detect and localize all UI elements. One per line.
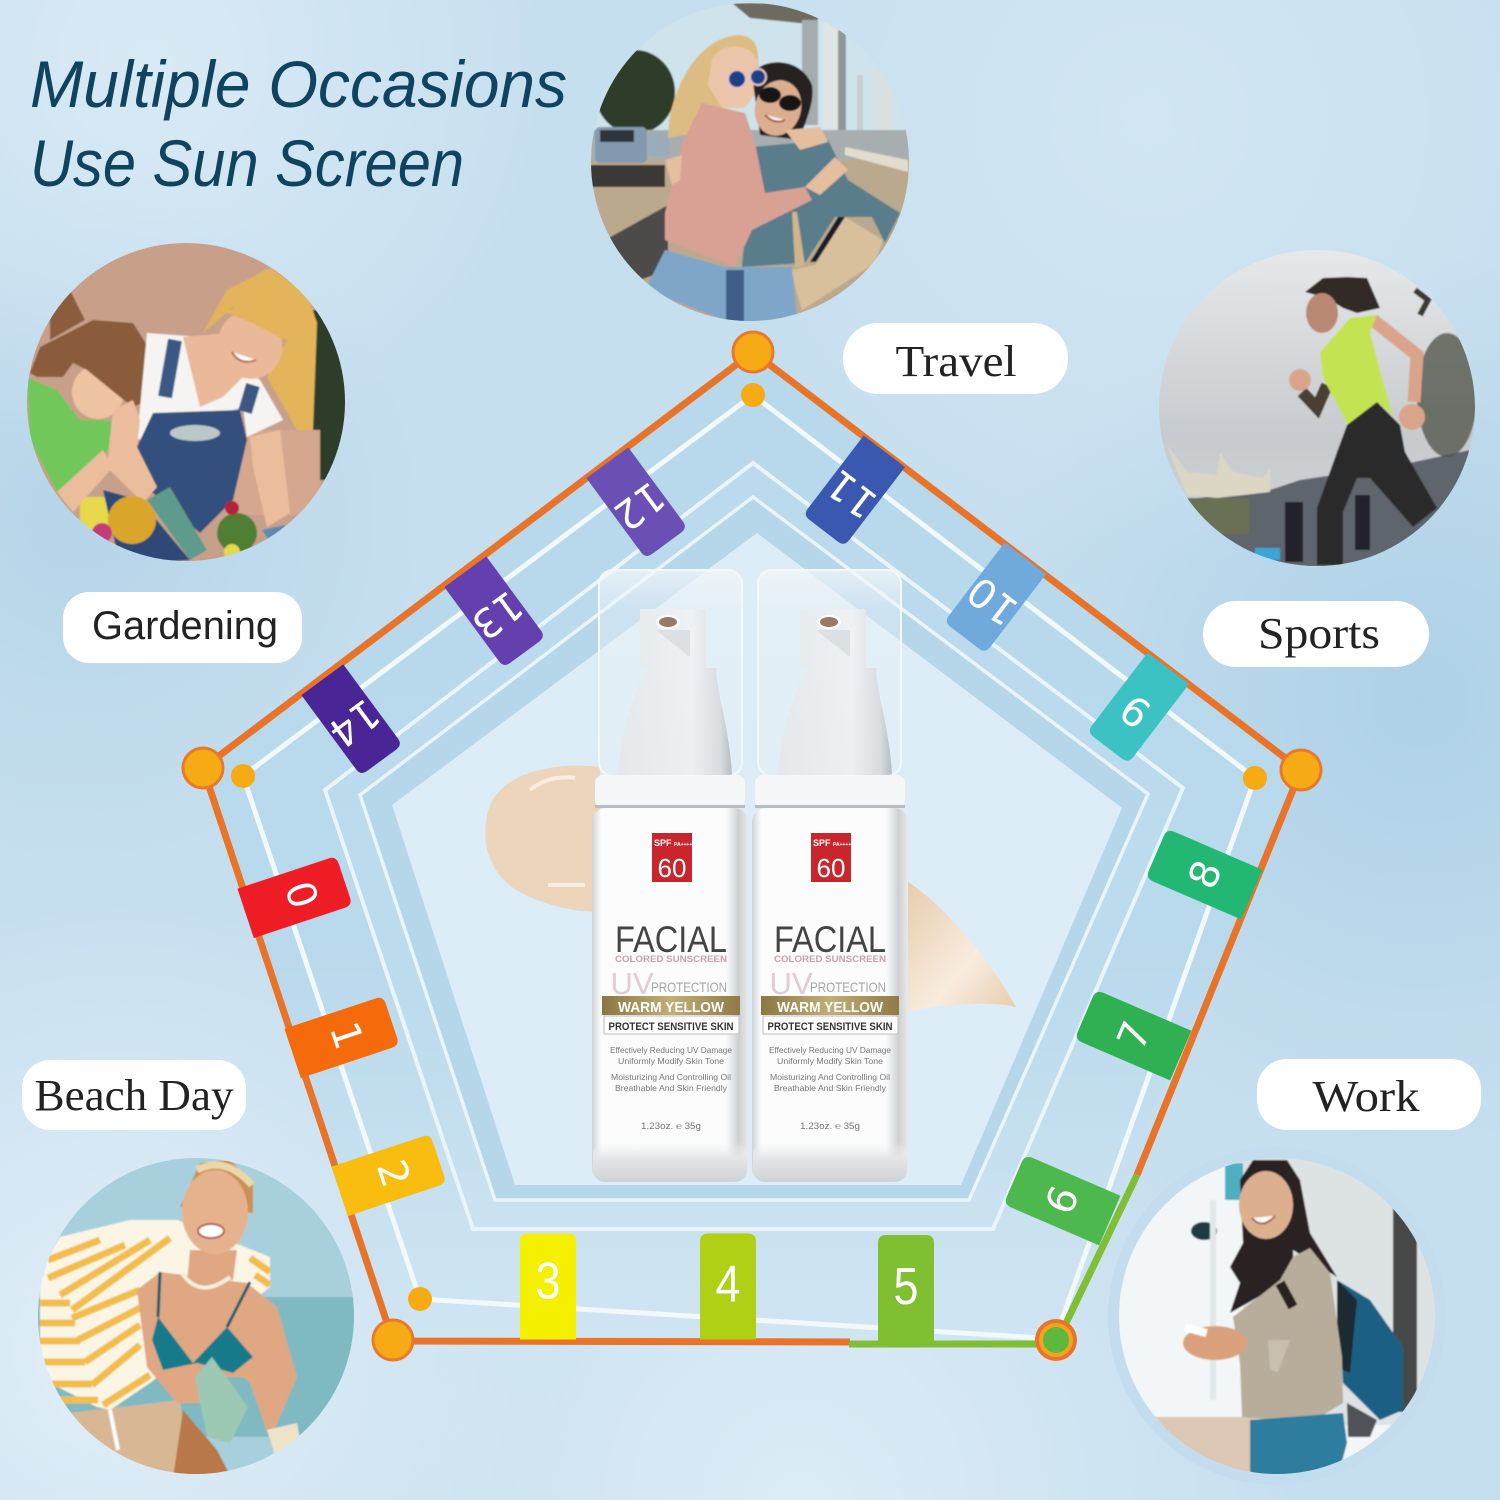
tab 14: 14: [320, 689, 388, 756]
photo: gardening: [25, 240, 350, 565]
bottle body: [592, 570, 748, 1182]
title: [30, 47, 567, 200]
label text: WARM YELLOW: [777, 999, 884, 1016]
label text: PROTECT SENSITIVE SKIN: [768, 1021, 893, 1033]
label text: Breathable And Skin Friendly: [615, 1083, 728, 1093]
cream swatches: [485, 766, 1016, 1012]
label text: Uniformly Modify Skin Tone: [618, 1056, 724, 1066]
tab 11: [803, 435, 905, 547]
label text: UV: [769, 966, 813, 1001]
label text: Effectively Reducing UV Damage: [610, 1045, 732, 1055]
tab 5: 5: [894, 1258, 918, 1316]
SPF badge: [811, 833, 851, 883]
SPF badge: [652, 833, 692, 883]
label: Gardening: [63, 592, 302, 663]
tab 12: 12: [605, 472, 673, 539]
tab 5: [878, 1235, 934, 1343]
tab 13: 13: [463, 581, 531, 648]
photo: travel: [590, 0, 910, 325]
label text: PROTECTION: [651, 979, 727, 995]
product bottle: left: [592, 570, 748, 1182]
label: Gardening: Gardening: [92, 604, 278, 648]
tab 0: 0: [275, 876, 327, 914]
label text: Breathable And Skin Friendly: [774, 1083, 887, 1093]
tab 2: [331, 1134, 447, 1216]
SPF badge: 60: [817, 853, 845, 883]
label text: WARM YELLOW: [618, 999, 725, 1016]
vertex dots: [183, 332, 1321, 1361]
title: Multiple Occasions: [30, 47, 567, 121]
photo: work: [1108, 1147, 1446, 1485]
tab 7: [1075, 990, 1191, 1080]
tab 11: 11: [818, 460, 886, 527]
label text: Moisturizing And Controlling Oil: [611, 1072, 731, 1082]
label text: [761, 919, 899, 1132]
tab 3: [520, 1234, 576, 1340]
label text: FACIAL: [774, 919, 886, 960]
label: Sports: [1203, 601, 1429, 667]
label text: UV: [610, 966, 654, 1001]
dark hair: [752, 62, 813, 140]
product bottle: right: [752, 570, 908, 1182]
tab 13: [444, 556, 546, 668]
inner white pentagon line: [243, 395, 1255, 1338]
SPF badge: SPF PA++++: [813, 838, 851, 848]
label text: COLORED SUNSCREEN: [774, 954, 886, 964]
label: Beach Day: Beach Day: [34, 1071, 234, 1120]
tab 9: [1087, 652, 1189, 764]
bottle body: [752, 570, 908, 1182]
tab 6: [1004, 1155, 1120, 1245]
label text: PROTECTION: [810, 979, 886, 995]
pentagon backdrop bands: [203, 352, 1301, 1340]
label text: Moisturizing And Controlling Oil: [770, 1072, 890, 1082]
label text: COLORED SUNSCREEN: [615, 954, 727, 964]
tab 1: 1: [320, 1016, 372, 1055]
photo: beach: [35, 1155, 360, 1480]
tab 7: 7: [1109, 1015, 1161, 1057]
tab 4: [700, 1234, 756, 1340]
tab 2: 2: [367, 1154, 419, 1193]
label text: PROTECT SENSITIVE SKIN: [608, 1021, 734, 1033]
label text: FACIAL: [615, 919, 727, 960]
jeans: [645, 250, 798, 325]
tab 3: 3: [536, 1252, 560, 1310]
denim shirt: [742, 140, 900, 267]
tab 0: [237, 856, 353, 938]
label text: [602, 919, 740, 1132]
tab 8: 8: [1180, 854, 1232, 896]
label: Travel: Travel: [896, 337, 1016, 386]
numbered tabs: [237, 435, 1262, 1343]
tab 9: 9: [1112, 684, 1160, 736]
tan bag: [792, 217, 883, 310]
label text: 1.23oz. ℮ 35g: [641, 1121, 701, 1132]
tab 1: [284, 996, 400, 1078]
blonde hair: [668, 35, 758, 138]
tab 12: [586, 447, 688, 559]
photo: sports: [1155, 245, 1480, 570]
tab 4: 4: [716, 1256, 740, 1314]
pink jacket: [665, 103, 812, 267]
tab 14: [301, 664, 403, 776]
SPF badge: 60: [658, 853, 686, 883]
SPF badge: SPF PA++++: [654, 838, 692, 848]
label: Sports: Sports: [1258, 609, 1380, 658]
title: Use Sun Screen: [30, 126, 464, 200]
tab 6: 6: [1037, 1180, 1089, 1221]
label text: Effectively Reducing UV Damage: [769, 1045, 891, 1055]
label text: Uniformly Modify Skin Tone: [777, 1056, 883, 1066]
tab 10: [944, 542, 1046, 654]
label text: 1.23oz. ℮ 35g: [800, 1121, 860, 1132]
label: Work: Work: [1312, 1072, 1420, 1121]
tab 10: 10: [959, 567, 1027, 634]
tab 8: [1146, 829, 1262, 919]
label: Work: [1257, 1059, 1481, 1130]
label: Travel: [843, 323, 1068, 394]
label: Beach Day: [22, 1060, 246, 1130]
orange pentagon outline: [203, 352, 1301, 1344]
